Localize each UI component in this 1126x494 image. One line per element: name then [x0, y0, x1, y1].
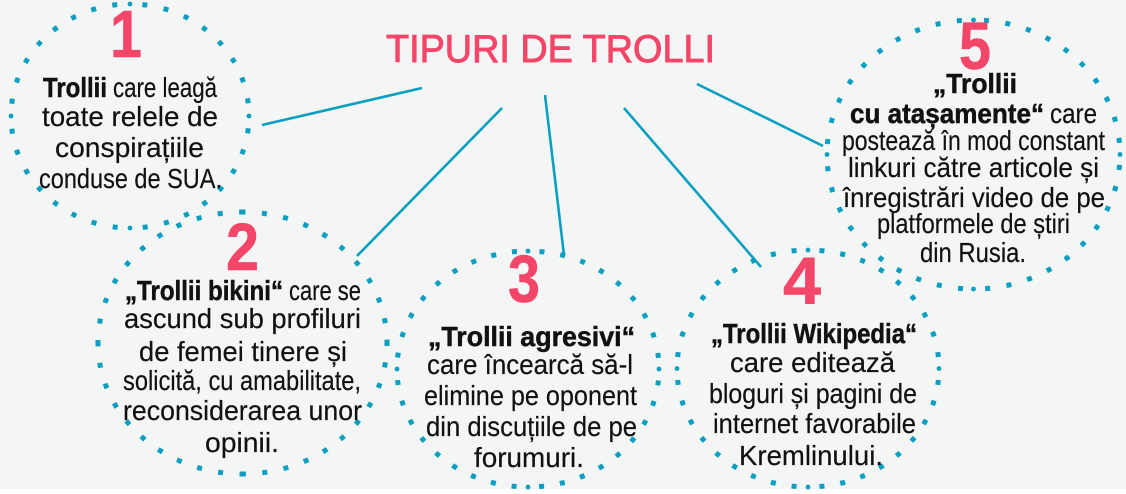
- text block 4: internet favorabile: [713, 408, 916, 439]
- text block 2: reconsiderarea unor: [123, 395, 362, 426]
- dotted circle 1: [9, 2, 251, 230]
- arrow: line to panel 2: [357, 108, 502, 256]
- text block 1: conspirațiile: [55, 132, 204, 163]
- text block 4: [709, 318, 917, 471]
- text block 5: înregistrări video de pe: [842, 182, 1105, 213]
- arrow: line to panel 1: [262, 88, 422, 125]
- text block 2: [123, 275, 362, 458]
- text block 1: care leagă: [113, 72, 217, 103]
- dotted circle 5: [825, 18, 1122, 291]
- text block 4: care editează: [730, 347, 895, 378]
- text block 4: „Trollii Wikipedia“: [711, 318, 917, 349]
- panel: type 4: [675, 244, 941, 489]
- text block 5: linkuri către articole și: [848, 152, 1099, 183]
- text block 5: „Trollii: [933, 68, 1017, 99]
- connector lines: [262, 84, 823, 267]
- text block 2: solicită, cu amabilitate,: [123, 365, 361, 396]
- number 5: 5: [959, 9, 991, 84]
- number 4: 4: [783, 244, 821, 319]
- number 2: 2: [226, 210, 259, 285]
- text block 5: care: [1050, 98, 1097, 129]
- text block 1: Trollii: [43, 72, 107, 103]
- text block 2: opinii.: [205, 427, 279, 458]
- text block 3: [424, 321, 637, 473]
- arrow: line to panel 4: [624, 108, 761, 267]
- text block 3: forumuri.: [474, 442, 584, 473]
- text block 5: [842, 68, 1105, 268]
- panel: type 1: [9, 0, 251, 230]
- text block 3: „Trollii agresivi“: [428, 321, 635, 352]
- panel: type 5: [825, 9, 1122, 291]
- text block 5: cu atașamente“: [850, 98, 1044, 129]
- title: TIPURI DE TROLLI: [386, 28, 715, 71]
- text block 1: [39, 72, 222, 194]
- text block 2: de femei tinere și: [139, 336, 347, 367]
- text block 2: „Trollii bikini“: [125, 275, 283, 306]
- number 3: 3: [508, 242, 540, 317]
- text block 2: care se: [289, 275, 361, 306]
- text block 3: din discuțiile de pe: [426, 411, 637, 442]
- text block 5: din Rusia.: [920, 237, 1026, 268]
- text block 4: Kremlinului.: [739, 440, 883, 471]
- arrow: line to panel 5: [697, 84, 823, 146]
- dotted circle 2: [96, 210, 389, 476]
- text block 4: bloguri și pagini de: [709, 378, 917, 409]
- text block 1: toate relele de: [42, 101, 218, 132]
- dotted circle 3: [395, 249, 661, 489]
- text block 1: conduse de SUA.: [39, 163, 222, 194]
- text block 5: platformele de știri: [877, 208, 1070, 239]
- text block 3: elimine pe oponent: [424, 380, 637, 411]
- text block 3: care încearcă să-l: [427, 349, 633, 380]
- panel: type 2: [96, 210, 389, 476]
- text block 2: ascund sub profiluri: [124, 303, 361, 334]
- arrow: line to panel 3: [545, 95, 564, 255]
- panel: type 3: [395, 242, 661, 489]
- dotted circle 4: [675, 248, 941, 489]
